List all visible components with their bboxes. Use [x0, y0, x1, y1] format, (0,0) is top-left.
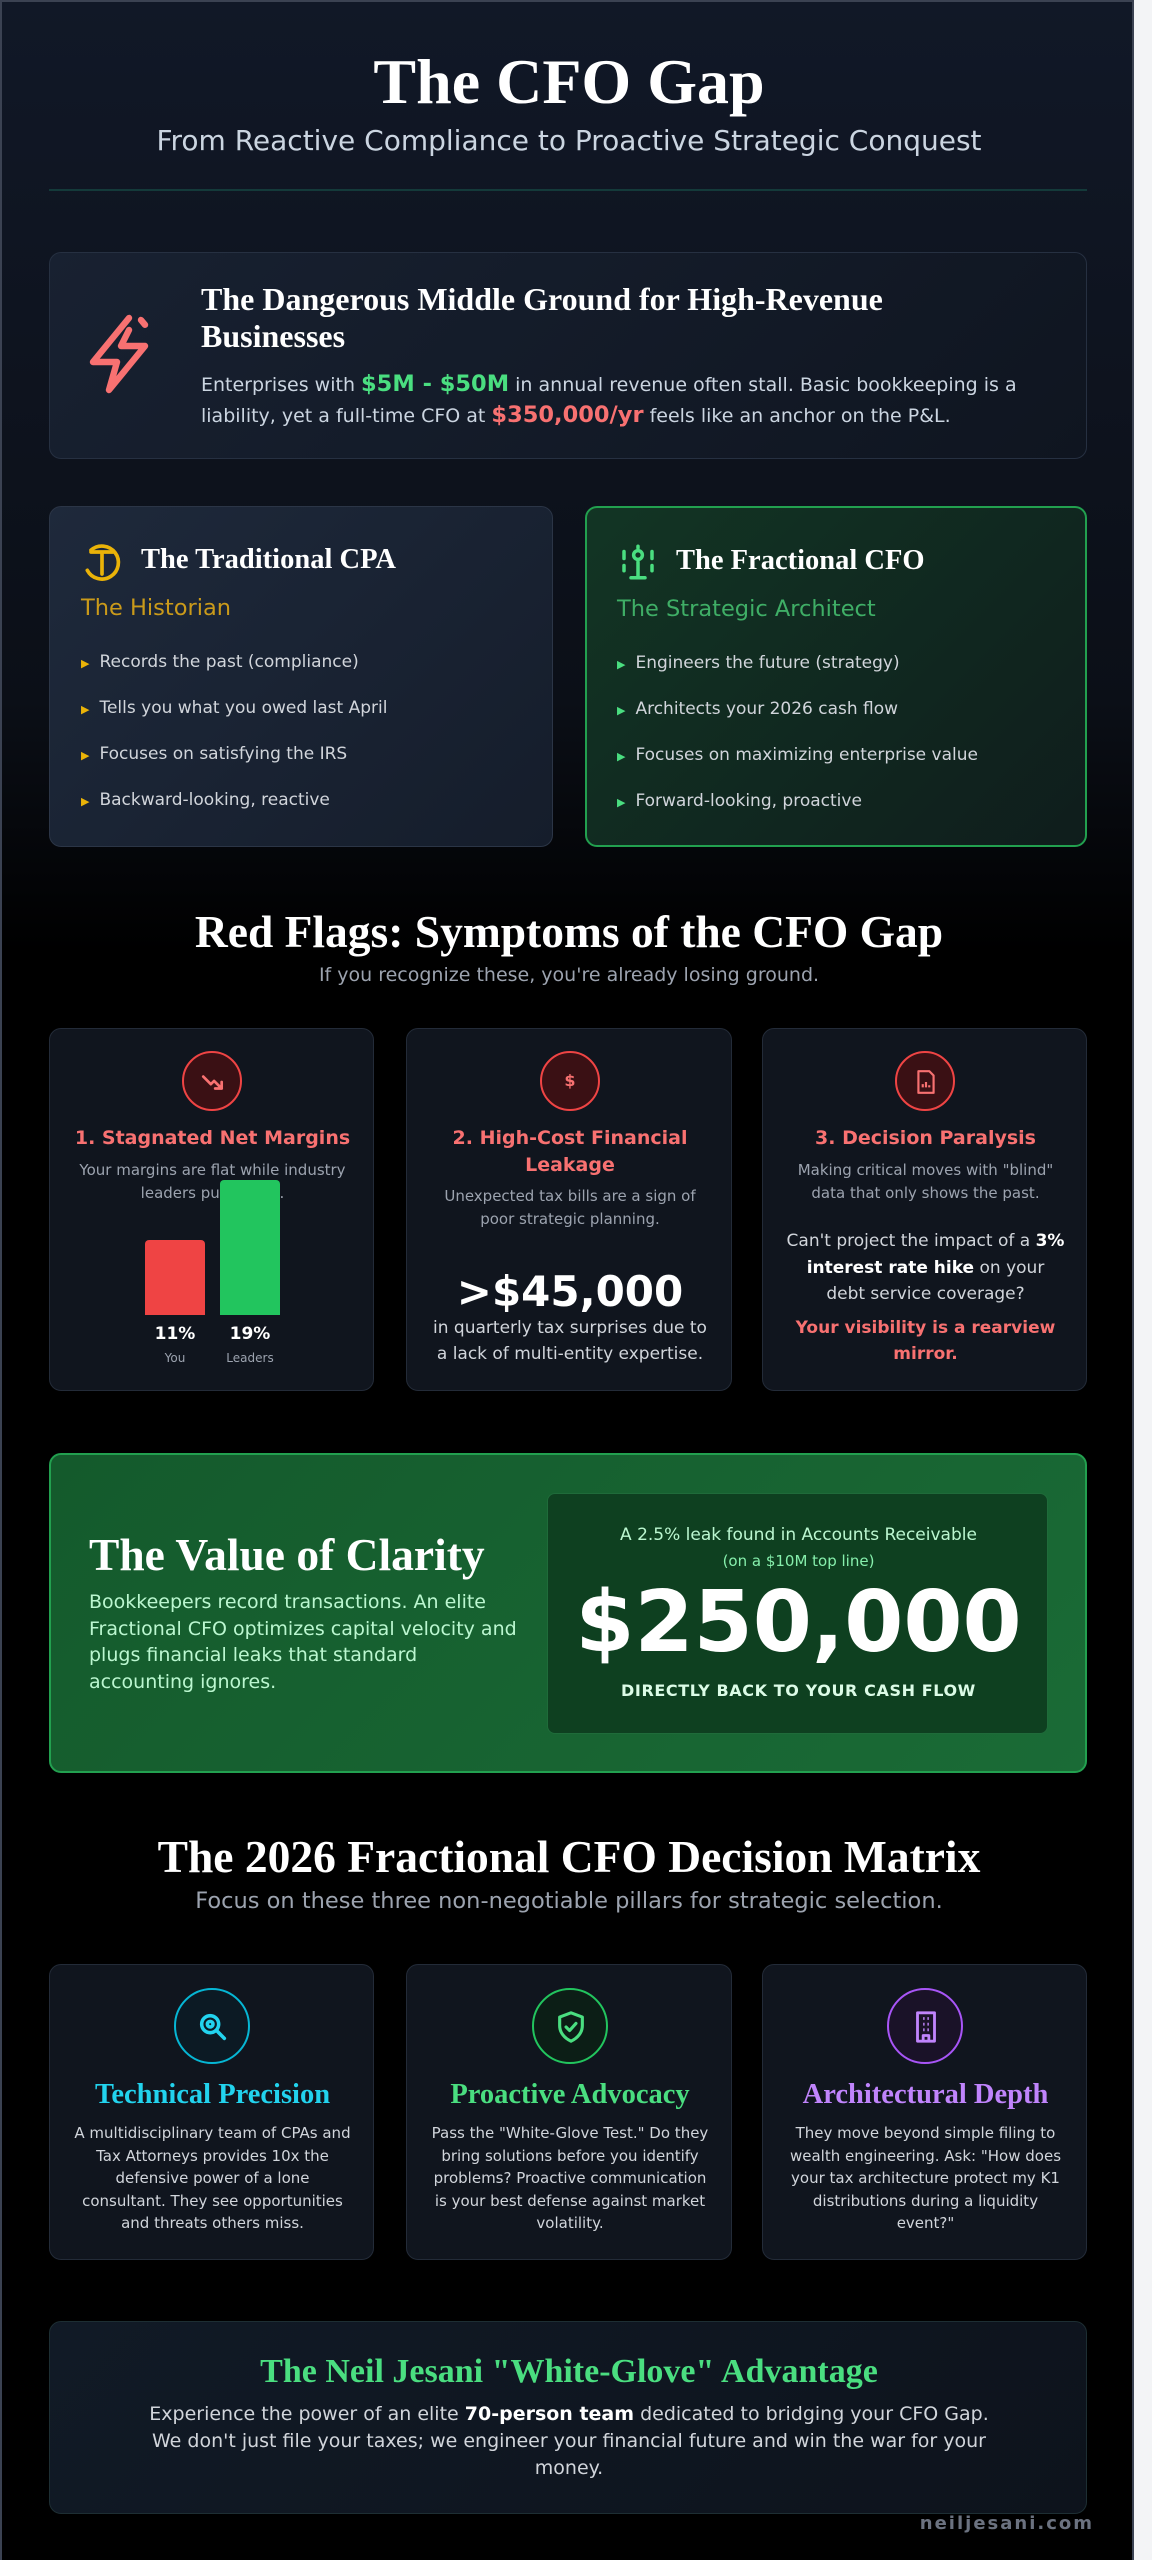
- icon: dollar: [540, 1051, 600, 1111]
- description: A multidisciplinary team of CPAs and: [74, 2124, 351, 2142]
- description: [444, 1187, 696, 1228]
- panel: proactive advocacy: [406, 1964, 732, 2260]
- heading: The Dangerous Middle Ground for High-Revenue: [201, 281, 883, 317]
- bar chart: 19%: [230, 1324, 270, 1344]
- icon: report: [895, 1051, 955, 1111]
- callout: Your visibility is a rearview: [796, 1318, 1055, 1338]
- icon: trend down: [182, 1051, 242, 1111]
- panel: stagnated margins: [49, 1028, 374, 1391]
- card heading: Proactive Advocacy: [450, 2079, 690, 2110]
- subheading: The Historian: [81, 595, 231, 621]
- description: Unexpected tax bills are a sign of: [444, 1187, 696, 1205]
- number caption: in quarterly tax surprises due to: [433, 1318, 707, 1338]
- description: is your best defense against market: [435, 2192, 705, 2210]
- heading: [201, 281, 883, 354]
- heading: red flags: Red Flags: Symptoms of the CFO Gap: [195, 906, 943, 957]
- description: defensive power of a lone: [115, 2169, 310, 2187]
- subheading: red flags: If you recognize these, you're already losing ground.: [319, 964, 819, 986]
- stat box: [547, 1493, 1048, 1734]
- text block: Fractional CFO optimizes capital velocity and: [89, 1618, 517, 1640]
- bar chart: You: [165, 1351, 185, 1365]
- card heading: Technical Precision: [95, 2079, 330, 2110]
- panel: financial leakage: [406, 1028, 732, 1391]
- description: [798, 1161, 1053, 1202]
- description: consultant. They see opportunities: [82, 2192, 343, 2210]
- description: Tax Attorneys provides 10x the: [96, 2147, 329, 2165]
- description: distributions during a liquidity: [813, 2192, 1038, 2210]
- stat box: $250,000: [575, 1573, 1022, 1672]
- description: and threats others miss.: [121, 2214, 304, 2232]
- panel: decision paralysis: [762, 1028, 1087, 1391]
- icon: dollar: $: [564, 1071, 576, 1090]
- heading: decision matrix: The 2026 Fractional CFO Decision Matrix: [158, 1831, 980, 1882]
- text block: Experience the power of an elite 70-person team dedicated to bridging your CFO Gap.: [149, 2403, 989, 2425]
- description: [74, 2124, 351, 2232]
- text block: Enterprises with $5M - $50M in annual revenue often stall. Basic bookkeeping is a: [201, 371, 1017, 397]
- callout: [796, 1318, 1055, 1364]
- text block: plugs financial leaks that standard: [89, 1644, 417, 1666]
- card heading: 3. Decision Paralysis: [815, 1127, 1036, 1149]
- bullet list: ▶ Records the past (compliance): [81, 652, 359, 672]
- description: leaders pull ahead.: [141, 1184, 284, 1202]
- card heading: 2. High-Cost Financial: [453, 1127, 687, 1149]
- callout: mirror.: [893, 1344, 958, 1364]
- text block: [149, 2403, 989, 2479]
- panel: technical precision: [49, 1964, 374, 2260]
- heading: The Value of Clarity: [89, 1529, 485, 1580]
- bullet list: ▶ Focuses on maximizing enterprise value: [617, 745, 978, 765]
- title: The CFO Gap: [373, 46, 765, 117]
- heading: Businesses: [201, 318, 345, 354]
- bar chart: Leaders: [226, 1351, 274, 1365]
- description: wealth engineering. Ask: "How does: [790, 2147, 1061, 2165]
- description: poor strategic planning.: [480, 1210, 660, 1228]
- icon: shield: [532, 1988, 608, 2064]
- heading: The Traditional CPA: [141, 544, 396, 575]
- heading: The Fractional CFO: [676, 545, 925, 576]
- description: Making critical moves with "blind": [798, 1161, 1053, 1179]
- icon: CPA: [85, 544, 120, 581]
- card heading: Leakage: [525, 1154, 615, 1176]
- description: [79, 1161, 346, 1202]
- description: [432, 2124, 708, 2232]
- subheading: decision matrix: Focus on these three non-negotiable pillars for strategic selection.: [195, 1888, 943, 1914]
- panel: traditional CPA: [49, 506, 553, 847]
- text block: accounting ignores.: [89, 1670, 276, 1692]
- icon: building: [887, 1988, 963, 2064]
- icon: lightning: [90, 314, 148, 394]
- bullet list: ▶ Architects your 2026 cash flow: [617, 699, 898, 719]
- bullet list: ▶ Backward-looking, reactive: [81, 790, 330, 810]
- subheading: The Strategic Architect: [617, 596, 876, 622]
- bar chart: [145, 1180, 280, 1365]
- description: Your margins are flat while industry: [79, 1161, 346, 1179]
- description: problems? Proactive communication: [434, 2169, 706, 2187]
- stat box: (on a $10M top line): [723, 1552, 874, 1570]
- description: [790, 2124, 1061, 2232]
- stat box: DIRECTLY BACK TO YOUR CASH FLOW: [621, 1681, 976, 1700]
- description: volatility.: [536, 2214, 604, 2232]
- description: bring solutions before you identify: [441, 2147, 699, 2165]
- question: interest rate hike on your: [807, 1258, 1044, 1278]
- card heading: 1. Stagnated Net Margins: [75, 1127, 350, 1149]
- bullet list: ▶ Forward-looking, proactive: [617, 791, 862, 811]
- text block: liability, yet a full-time CFO at $350,000/yr feels like an anchor on the P&L.: [201, 402, 951, 428]
- stat box: A 2.5% leak found in Accounts Receivable: [620, 1525, 977, 1545]
- bullet list: ▶ Tells you what you owed last April: [81, 698, 387, 718]
- panel: fractional CFO: [585, 506, 1087, 847]
- number caption: [433, 1318, 707, 1364]
- bullet list: [81, 652, 387, 810]
- footer: website: neiljesani.com: [920, 2513, 1094, 2534]
- number caption: a lack of multi-entity expertise.: [437, 1344, 703, 1364]
- text block: Bookkeepers record transactions. An elite: [89, 1591, 486, 1613]
- icon: search: [174, 1988, 250, 2064]
- panel: dangerous middle ground: [49, 252, 1087, 459]
- description: your tax architecture protect my K1: [791, 2169, 1060, 2187]
- subtitle: From Reactive Compliance to Proactive Strategic Conquest: [156, 124, 982, 157]
- icon: CFO: [622, 544, 654, 580]
- panel: white-glove advantage: [49, 2321, 1087, 2514]
- bullet list: ▶ Focuses on satisfying the IRS: [81, 744, 347, 764]
- bullet list: [617, 653, 978, 811]
- description: data that only shows the past.: [811, 1184, 1040, 1202]
- description: event?": [897, 2214, 954, 2232]
- question: Can't project the impact of a 3%: [787, 1231, 1064, 1251]
- question: [787, 1231, 1064, 1304]
- text block: We don't just file your taxes; we engineer your financial future and win the war for your: [152, 2430, 986, 2452]
- description: They move beyond simple filing to: [796, 2124, 1055, 2142]
- big number: >$45,000: [457, 1267, 683, 1316]
- bar chart: 11%: [155, 1324, 195, 1344]
- text block: [89, 1591, 517, 1692]
- text block: money.: [535, 2457, 603, 2479]
- card heading: [453, 1127, 687, 1176]
- panel: value of clarity: [49, 1453, 1087, 1773]
- description: Pass the "White-Glove Test." Do they: [432, 2124, 708, 2142]
- question: debt service coverage?: [826, 1284, 1025, 1304]
- heading: The Neil Jesani "White-Glove" Advantage: [260, 2353, 878, 2390]
- panel: architectural depth: [762, 1964, 1087, 2260]
- text block: [201, 371, 1017, 428]
- bullet list: ▶ Engineers the future (strategy): [617, 653, 900, 673]
- card heading: Architectural Depth: [803, 2079, 1048, 2110]
